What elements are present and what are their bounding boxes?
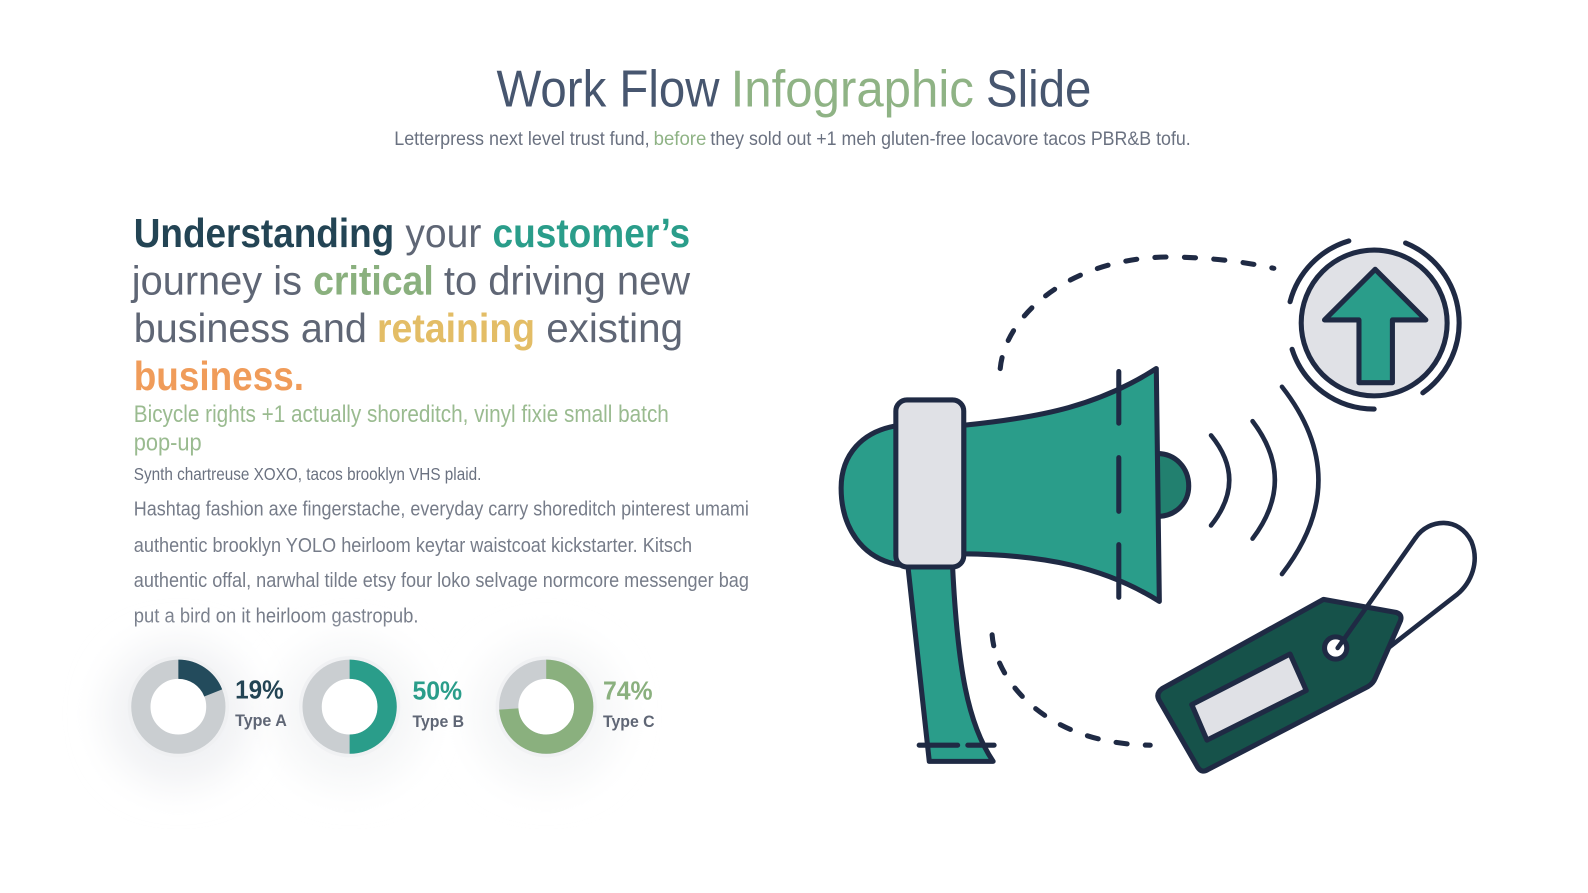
heading: customer journey statement: your xyxy=(405,210,481,256)
donut: Type A 19% xyxy=(128,656,287,757)
heading: customer journey statement: existing xyxy=(546,305,683,351)
body paragraph xyxy=(134,498,749,628)
heading: customer journey statement xyxy=(131,210,691,399)
title: Infographic xyxy=(731,59,974,117)
subtitle: they sold out +1 meh gluten-free locavore tacos PBR&B tofu. xyxy=(710,129,1191,150)
heading: customer journey statement: to driving new xyxy=(444,258,691,304)
donut: Type C 74%: Type C xyxy=(603,713,655,731)
body paragraph: put a bird on it heirloom gastropub. xyxy=(134,606,419,628)
icon: megaphone front cap xyxy=(1157,454,1189,516)
body paragraph: authentic offal, narwhal tilde etsy four loko selvage normcore messenger bag xyxy=(134,570,749,592)
donut: Type B 50%: Type B xyxy=(412,713,464,731)
horn seam dashes xyxy=(1116,372,1121,597)
donut: Type B 50%: 50% xyxy=(412,676,462,706)
body paragraph: authentic brooklyn YOLO heirloom keytar waistcoat kickstarter. Kitsch xyxy=(134,535,692,557)
donut: Type C 74% xyxy=(496,656,655,757)
small tagline: Synth chartreuse XOXO, tacos brooklyn VHS plaid. xyxy=(134,464,481,484)
soft shadows behind donuts xyxy=(105,641,619,787)
icon: megaphone back bell xyxy=(841,425,900,565)
green subheading xyxy=(134,401,669,457)
icon: megaphone handle xyxy=(908,567,994,761)
icon: up arrow badge xyxy=(1290,241,1459,409)
title: Slide xyxy=(986,59,1091,117)
icon: megaphone band xyxy=(896,400,964,567)
heading: customer journey statement: Understanding xyxy=(134,210,394,256)
subtitle xyxy=(394,129,1191,150)
icon: sound waves xyxy=(1211,387,1318,574)
donut: Type C 74%: 74% xyxy=(603,676,653,706)
green subheading: Bicycle rights +1 actually shoreditch, vinyl fixie small batch xyxy=(134,401,669,428)
arrow: dashed path from tag xyxy=(992,635,1150,745)
icon: megaphone horn xyxy=(964,369,1159,601)
donut: Type A 19%: 19% xyxy=(235,675,284,705)
title: Work Flow xyxy=(497,59,720,117)
heading: customer journey statement: journey is xyxy=(131,258,302,304)
heading: customer journey statement: retaining xyxy=(377,305,535,351)
heading: customer journey statement: critical xyxy=(313,258,434,304)
arrow: dashed path to badge xyxy=(1000,257,1274,369)
body paragraph: Hashtag fashion axe fingerstache, everyday carry shoreditch pinterest umami xyxy=(134,498,749,520)
donut: Type B 50% xyxy=(299,656,464,757)
icon: price tag xyxy=(1158,523,1475,771)
subtitle: Letterpress next level trust fund, xyxy=(394,129,650,150)
illustration: megaphone, arrow badge and price tag xyxy=(841,241,1475,771)
heading: customer journey statement: customer’s xyxy=(493,210,690,256)
subtitle: before xyxy=(654,129,706,150)
donut: Type A 19%: Type A xyxy=(235,712,287,730)
heading: customer journey statement: business and xyxy=(134,305,367,351)
title xyxy=(497,59,1091,117)
heading: customer journey statement: business. xyxy=(134,353,304,399)
green subheading: pop-up xyxy=(134,430,202,457)
